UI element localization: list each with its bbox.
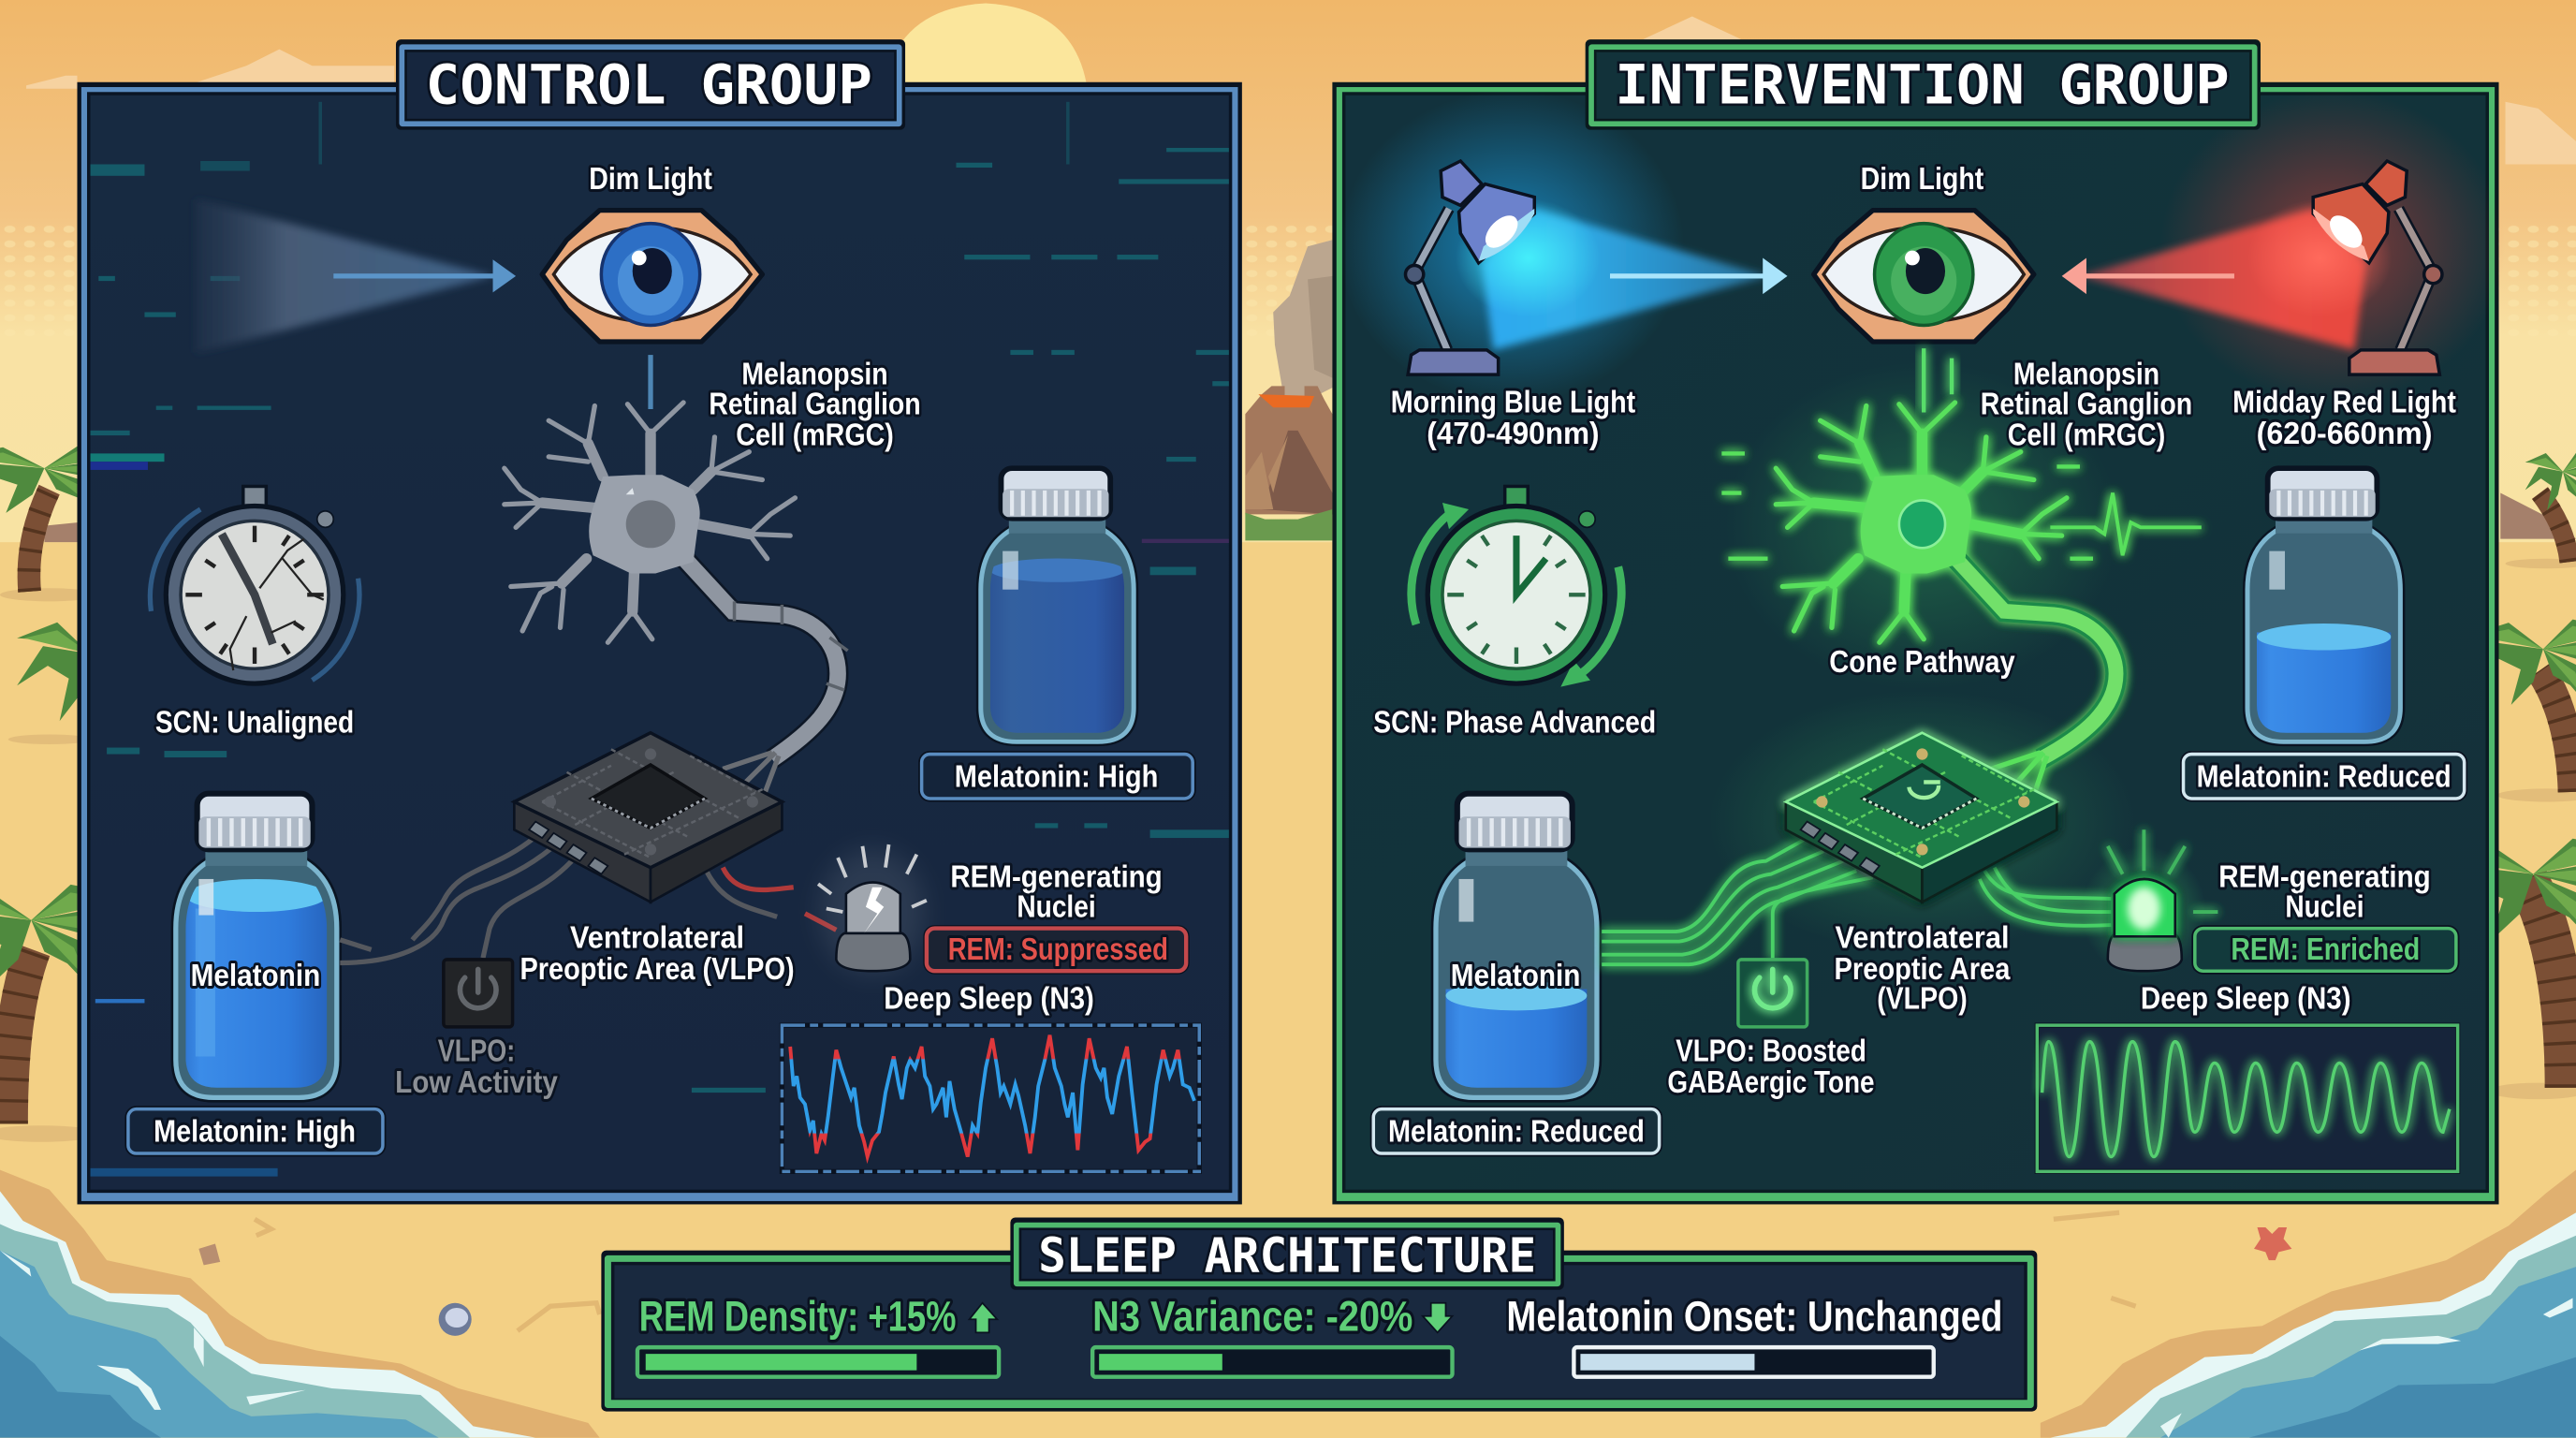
ambient light glows: [1339, 91, 2506, 953]
icon: red desk lamp: [2313, 161, 2442, 374]
label box: Melatonin High (right): Melatonin: High: [955, 760, 1158, 795]
label: REM-generating Nuclei: Nuclei: [2285, 889, 2364, 924]
icon: green alarm light: [2082, 829, 2217, 977]
label box: REM Enriched: REM: Enriched: [2231, 932, 2420, 967]
label: Melanopsin Retinal Ganglion Cell: Cell (mRGC): [2008, 418, 2165, 453]
title: sleep architecture: SLEEP ARCHITECTURE: [1038, 1228, 1536, 1284]
icon: melatonin bottle reduced (left): [1436, 794, 1597, 1104]
icon: cracked stopwatch: [150, 486, 359, 683]
label: Dim Light: Dim Light: [589, 162, 712, 197]
metric: N3 variance: [1092, 1293, 1453, 1377]
halftone sky band: [0, 225, 2576, 337]
label: Dim Light: Dim Light: [1861, 162, 1983, 197]
label: REM-generating Nuclei: REM-generating: [2218, 860, 2431, 895]
title: intervention group: INTERVENTION GROUP: [1615, 53, 2230, 117]
glitch noise: [91, 102, 1229, 1177]
label box: Melatonin High (right): [922, 755, 1193, 799]
label: Deep Sleep N3: Deep Sleep (N3): [884, 982, 1094, 1017]
signal line from eye to neuron: [1924, 348, 1952, 413]
label: REM-generating Nuclei: [2218, 860, 2431, 924]
title: control group: CONTROL GROUP: [426, 53, 872, 117]
icon: melatonin bottle high (dark): [981, 468, 1134, 745]
label box: Melatonin High (left): [128, 1109, 383, 1153]
label: REM-generating Nuclei: Nuclei: [1017, 889, 1096, 924]
clouds: [26, 17, 2576, 165]
label box: REM Suppressed: REM: Suppressed: [948, 932, 1168, 967]
icon: glowing power button: [1738, 960, 1808, 1027]
label box: REM Suppressed: [927, 929, 1186, 971]
label: Ventrolateral Preoptic Area (VLPO): Preoptic Area: [1835, 952, 2011, 987]
label: Midday Red Light: (620-660nm): [2257, 417, 2432, 451]
wires from chip (dark): [340, 838, 836, 962]
arrow down: [1423, 1303, 1453, 1332]
sea left: [0, 1170, 600, 1438]
label: REM-generating Nuclei: [950, 860, 1163, 924]
label: Morning Blue Light: (470-490nm): [1427, 417, 1600, 451]
label: VLPO Boosted GABAergic Tone: VLPO: Boosted: [1676, 1034, 1866, 1069]
label: Ventrolateral Preoptic Area (VLPO): Ventrolateral: [570, 921, 744, 956]
chart: regular slow-wave EEG trace: [2037, 1025, 2458, 1171]
label box: Melatonin Reduced (right): Melatonin: Reduced: [2197, 760, 2452, 795]
label box: Melatonin High (left): Melatonin: High: [154, 1115, 356, 1150]
label: Melanopsin Retinal Ganglion Cell: Retinal Ganglion: [709, 387, 921, 421]
label: Melanopsin Retinal Ganglion Cell: Retinal Ganglion: [1981, 387, 2192, 421]
label: Melanopsin Retinal Ganglion Cell: Cell (mRGC): [736, 418, 894, 453]
horizon hills: [44, 493, 2576, 542]
label: VLPO Boosted GABAergic Tone: GABAergic Tone: [1667, 1065, 1875, 1100]
label: Ventrolateral Preoptic Area (VLPO): [520, 921, 795, 987]
label: Ventrolateral Preoptic Area (VLPO): Preoptic Area (VLPO): [520, 952, 795, 987]
label: Ventrolateral Preoptic Area (VLPO): (VLPO): [1877, 982, 1968, 1017]
label: Melatonin: Melatonin: [1451, 959, 1580, 993]
label: REM-generating Nuclei: REM-generating: [950, 860, 1163, 895]
progress bar: [1092, 1347, 1453, 1377]
progress bar: [637, 1347, 999, 1377]
label: VLPO Low Activity: Low Activity: [395, 1065, 558, 1100]
blue light beam: [1456, 198, 1788, 350]
palm trees right: [2432, 451, 2576, 1099]
icon: blue desk lamp: [1405, 161, 1534, 374]
sun: [884, 4, 1088, 91]
label: Deep Sleep N3: Deep Sleep (N3): [2141, 982, 2351, 1017]
volcano: [1245, 240, 1332, 540]
icon: green VLPO chip: [1786, 733, 2056, 902]
label: VLPO Low Activity: [395, 1034, 558, 1100]
icon: melatonin bottle reduced (right): [2247, 468, 2400, 743]
metric: N3 variance: N3 Variance: -20%: [1092, 1293, 1412, 1341]
icon: melatonin bottle high (bright): [176, 794, 337, 1103]
panel: sleep architecture: [601, 1217, 2037, 1412]
progress bar: [1573, 1347, 1934, 1377]
icon: eye (green iris): [1814, 211, 2034, 342]
icon: heartbeat pulse: [2050, 493, 2202, 555]
icon: eye (blue iris): [542, 211, 762, 342]
arrow up: [970, 1303, 997, 1332]
metric: melatonin onset: Melatonin Onset: Unchanged: [1506, 1293, 2002, 1341]
panel: control group: [77, 82, 1242, 1204]
panel: intervention group: [1332, 82, 2506, 1204]
label: Melanopsin Retinal Ganglion Cell: Melanopsin: [741, 358, 888, 392]
label box: Melatonin Reduced (left): Melatonin: Reduced: [1388, 1115, 1645, 1150]
label: SCN Phase Advanced: SCN: Phase Advanced: [1373, 706, 1656, 741]
label: Melanopsin Retinal Ganglion Cell: [1981, 358, 2192, 453]
palm trees left: [0, 445, 164, 1142]
icon: grey VLPO chip: [514, 733, 782, 902]
icon: glowing green neuron with axon: [1721, 403, 2116, 795]
icon: grey neuron with axon: [505, 403, 848, 795]
label box: REM Enriched: [2195, 929, 2456, 971]
sea right: [2041, 1170, 2576, 1438]
icon: green stopwatch: [1412, 486, 1621, 687]
title: intervention group: [1586, 39, 2261, 130]
icon: broken alarm light: [818, 844, 927, 975]
chart: erratic EEG trace: [782, 1025, 1199, 1171]
label: Ventrolateral Preoptic Area (VLPO): [1835, 921, 2011, 1017]
label: Cone Pathway: Cone Pathway: [1829, 645, 2015, 680]
label: Melatonin: Melatonin: [191, 959, 320, 993]
icon: dim power button: [444, 960, 513, 1027]
label: VLPO Low Activity: VLPO:: [438, 1034, 515, 1069]
label: VLPO Boosted GABAergic Tone: [1667, 1034, 1875, 1100]
label: Morning Blue Light: Morning Blue Light: [1391, 386, 1635, 420]
metric: melatonin onset: [1506, 1293, 2002, 1377]
label box: Melatonin Reduced (left): [1373, 1109, 1660, 1153]
label box: Melatonin Reduced (right): [2184, 755, 2465, 799]
light beam into eye (dim): [196, 198, 516, 353]
label: Ventrolateral Preoptic Area (VLPO): Ventrolateral: [1835, 921, 2009, 956]
label: Melanopsin Retinal Ganglion Cell: Melanopsin: [2013, 358, 2159, 392]
label: Melanopsin Retinal Ganglion Cell: [709, 358, 921, 453]
signal line from eye to neuron: [648, 355, 653, 409]
label: SCN Unaligned: SCN: Unaligned: [155, 706, 354, 741]
label: Midday Red Light: [2232, 386, 2456, 451]
wires from chip (glowing): [1602, 838, 2111, 964]
title: control group: [396, 39, 905, 130]
red light beam: [2062, 198, 2392, 350]
metric: REM density: REM Density: +15%: [639, 1293, 956, 1341]
label: Midday Red Light: Midday Red Light: [2232, 386, 2456, 420]
label: Morning Blue Light: [1391, 386, 1635, 451]
metric: REM density: [637, 1293, 999, 1377]
sand marks, shell and starfish: [198, 1212, 2291, 1336]
